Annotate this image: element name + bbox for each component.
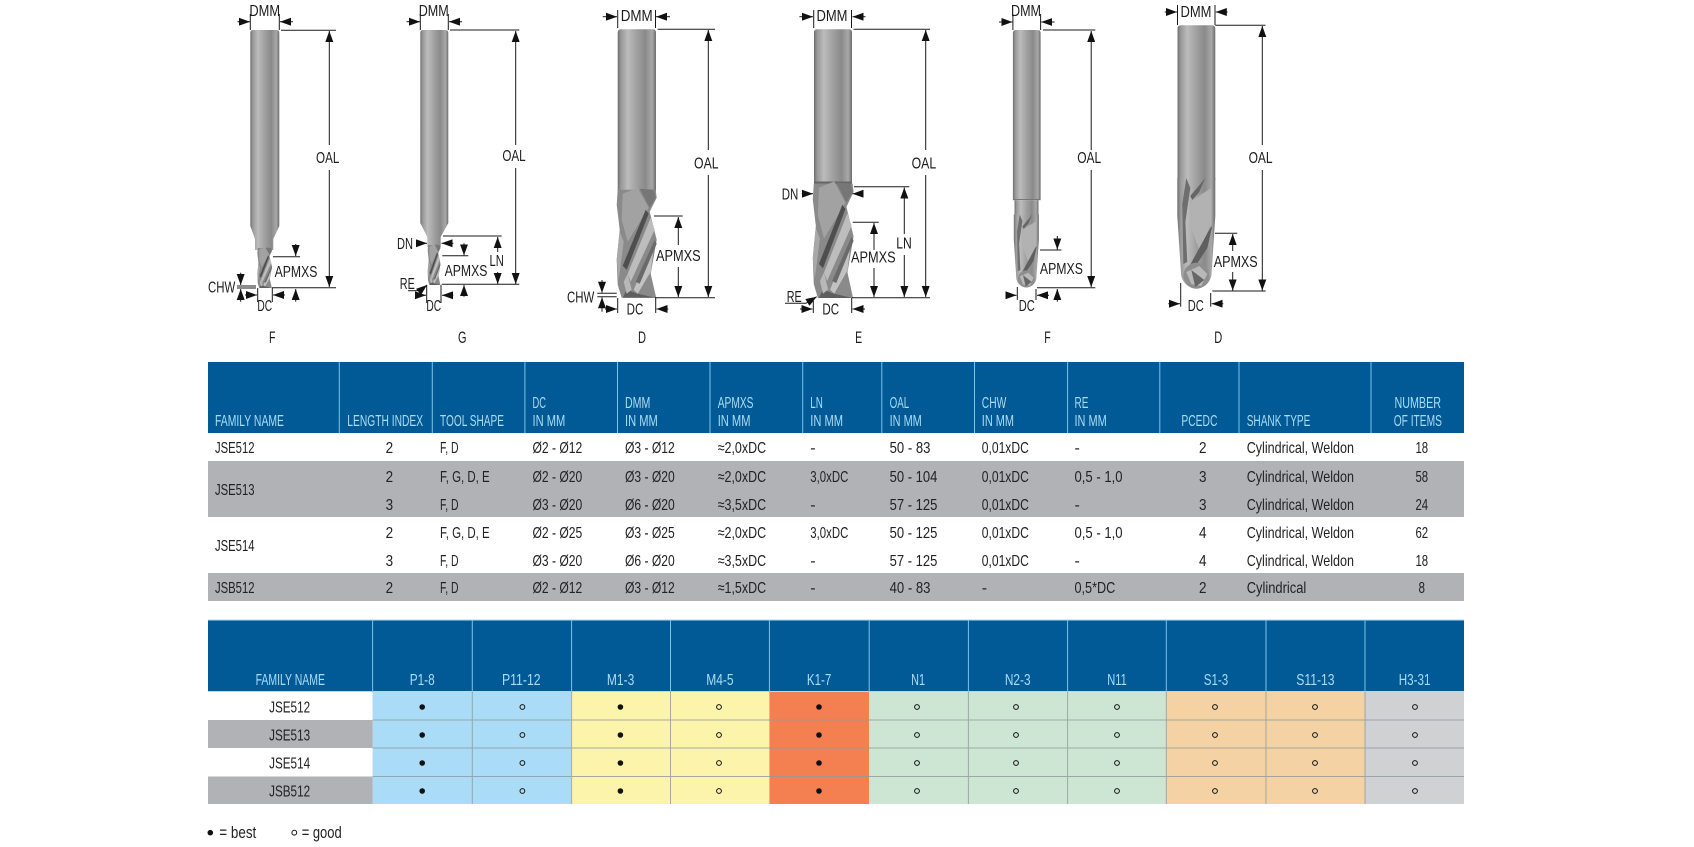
tool drawing: F short neck [208, 3, 339, 347]
row group: JSE514: 3,0xDC [810, 525, 848, 542]
row: JSB512: 40 - 83 [890, 580, 930, 597]
family name cells: JSB512 [269, 784, 310, 800]
dimension lines [406, 14, 519, 303]
row: JSE512: - [1074, 440, 1080, 457]
row group: JSE513: 24 [1415, 497, 1428, 514]
table header: FAMILY NAME [256, 672, 325, 689]
dimension labels [397, 3, 526, 315]
dimension labels: APMXS [1040, 261, 1083, 278]
row: JSB512: 2 [386, 580, 393, 597]
row: JSE512: JSE512 [215, 440, 255, 457]
dimension labels: APMXS [851, 250, 896, 267]
cutter body [1177, 25, 1215, 289]
table header: IN MM [890, 413, 922, 430]
table header: N2-3 [1005, 672, 1031, 689]
cutter body [617, 29, 657, 298]
row: JSE512: Cylindrical, Weldon [1247, 440, 1354, 457]
dimension labels: APMXS [1214, 254, 1258, 271]
row group: JSE514: 57 - 125 [890, 553, 937, 570]
row group: JSE513: 50 - 104 [890, 469, 937, 486]
row: JSE512 [215, 440, 1428, 457]
row group: JSE513: - [1074, 497, 1080, 514]
row: JSB512 [208, 573, 1464, 601]
cutter body [250, 30, 279, 288]
dimension labels: DC [822, 302, 839, 319]
row: JSE512: 2 [1199, 440, 1207, 457]
row: JSE512: F, D [440, 440, 458, 457]
table header: PCEDC [1181, 413, 1217, 430]
row: JSB512: F, D [440, 580, 458, 597]
dimension labels: LN [490, 253, 504, 270]
family name cells [208, 700, 373, 804]
row group: JSE514: Ø3 - Ø25 [625, 525, 675, 542]
row group: JSE513: Ø6 - Ø20 [625, 497, 675, 514]
row: JSE512: Ø3 - Ø12 [625, 440, 675, 457]
row group: JSE514: ≈3,5xDC [718, 553, 766, 570]
dimension labels: OAL [1077, 150, 1101, 167]
dimension labels: RE [400, 276, 415, 293]
table header: S1-3 [1204, 672, 1228, 689]
dimension labels: DN [397, 236, 413, 253]
table header: M4-5 [706, 672, 734, 689]
row: JSB512: 0,5*DC [1074, 580, 1115, 597]
shape letter D: D [1214, 328, 1222, 347]
table header: IN MM [810, 413, 843, 430]
dimension labels: DC [426, 298, 441, 315]
dimension labels [1011, 3, 1101, 315]
dimension labels: OAL [1249, 150, 1273, 167]
table header: N11 [1107, 672, 1127, 689]
shape letter D: D [638, 328, 646, 347]
row group: JSE514: 2 [386, 525, 393, 542]
table header: IN MM [625, 413, 658, 430]
row group: JSE514: Ø6 - Ø20 [625, 553, 675, 570]
family name cells: JSE513 [269, 728, 310, 744]
row group: JSE513: 3 [1199, 497, 1207, 514]
tool drawing: G neck with corner radius [397, 3, 526, 347]
dimension labels: OAL [316, 150, 339, 167]
dimension labels: DC [1019, 298, 1035, 315]
row group: JSE513: Ø3 - Ø20 [532, 497, 582, 514]
dimension labels: LN [896, 236, 912, 253]
table header: LENGTH INDEX [347, 413, 424, 430]
colored material columns [373, 692, 1464, 804]
row group: JSE513: Cylindrical, Weldon [1247, 497, 1354, 514]
table header: LN [810, 395, 823, 412]
tool drawing: D square end [567, 8, 719, 347]
table header: IN MM [718, 413, 750, 430]
row group: JSE514: 0,01xDC [982, 553, 1029, 570]
shape letter G: G [458, 328, 467, 347]
tool drawing: E corner radius [782, 8, 936, 347]
rating marks: best and good [419, 704, 1417, 794]
table header [208, 620, 1464, 692]
family name cells: JSE514 [269, 756, 310, 772]
material suitability table [208, 620, 1464, 804]
row: JSE512: - [810, 440, 816, 457]
row group: JSE514: - [810, 553, 816, 570]
table header: IN MM [1074, 413, 1107, 430]
dimension labels: DMM [1180, 4, 1212, 21]
table header [208, 362, 1464, 433]
row group: JSE514: 50 - 125 [890, 525, 937, 542]
table header: M1-3 [607, 672, 634, 689]
row: JSE512: 18 [1415, 440, 1428, 457]
dimension labels: DMM [621, 8, 653, 25]
row group: JSE513 [208, 461, 1464, 517]
dimension lines [999, 14, 1095, 302]
dimension labels: RE [787, 289, 802, 306]
table header: CHW [982, 395, 1007, 412]
row group: JSE514: 62 [1415, 525, 1428, 542]
dimension lines [597, 10, 715, 313]
specification table [208, 362, 1464, 601]
row: JSE512: ≈2,0xDC [718, 440, 766, 457]
table header: OAL [890, 395, 909, 412]
row group: JSE513: 0,01xDC [982, 469, 1029, 486]
table header: P11-12 [502, 672, 541, 689]
row group: JSE513: 0,5 - 1,0 [1074, 469, 1123, 486]
dimension labels: DMM [249, 3, 280, 20]
dimension labels: APMXS [445, 263, 487, 280]
dimension labels: OAL [694, 156, 719, 172]
dimension labels [208, 3, 339, 315]
dimension labels: OAL [502, 148, 526, 165]
shape letter F: F [269, 328, 276, 347]
tool drawing: D ball nose [1165, 4, 1273, 347]
dimension lines [1165, 5, 1266, 307]
row group: JSE513: JSE513 [215, 482, 255, 499]
dimension lines [785, 10, 930, 313]
table header: IN MM [982, 413, 1014, 430]
row group: JSE513: - [810, 497, 816, 514]
family name cells: JSE512 [269, 700, 310, 716]
table header: H3-31 [1399, 672, 1430, 689]
row: JSB512: 2 [1199, 580, 1207, 597]
dimension labels [1180, 4, 1273, 315]
dimension labels: APMXS [275, 264, 317, 281]
table header: S11-13 [1296, 672, 1335, 689]
row group: JSE513: F, D [440, 497, 458, 514]
row: JSB512: - [810, 580, 816, 597]
row group: JSE513: 0,01xDC [982, 497, 1029, 514]
legend: = best [219, 823, 257, 842]
row: JSE512: Ø2 - Ø12 [532, 440, 582, 457]
row: JSB512: Cylindrical [1247, 580, 1306, 597]
dimension labels: DC [257, 298, 272, 315]
row group: JSE514: 0,5 - 1,0 [1074, 525, 1123, 542]
row group: JSE514: 3 [386, 553, 393, 570]
row: JSE512: 0,01xDC [982, 440, 1029, 457]
row group: JSE513: 2 [386, 469, 393, 486]
row: JSB512: Ø2 - Ø12 [532, 580, 582, 597]
row group: JSE514: F, G, D, E [440, 525, 490, 542]
dimension labels: CHW [208, 280, 236, 297]
legend [208, 823, 342, 842]
row group: JSE514: - [1074, 553, 1080, 570]
cutter body [813, 29, 854, 298]
dimension labels: DMM [419, 3, 449, 20]
row: JSE512: 50 - 83 [890, 440, 930, 457]
table header: N1 [911, 672, 925, 689]
table header: RE [1074, 395, 1088, 412]
row group: JSE513: 3 [1199, 469, 1207, 486]
row group: JSE514: ≈2,0xDC [718, 525, 766, 542]
row group: JSE514: 4 [1199, 525, 1207, 542]
row group: JSE514: Ø3 - Ø20 [532, 553, 582, 570]
row group: JSE513: Ø2 - Ø20 [532, 469, 582, 486]
dimension labels: DMM [1011, 3, 1041, 20]
row group: JSE514: 0,01xDC [982, 525, 1029, 542]
table header: FAMILY NAME [215, 413, 284, 430]
table header: TOOL SHAPE [440, 413, 504, 430]
row: JSB512: 8 [1419, 580, 1425, 597]
table header: DMM [625, 395, 650, 412]
dimension lines [237, 14, 336, 302]
dimension labels: DC [1188, 298, 1204, 315]
legend: = good [302, 823, 342, 842]
row group: JSE513: F, G, D, E [440, 469, 490, 486]
dimension labels: DMM [816, 8, 848, 25]
row group: JSE514 [215, 525, 1428, 570]
table header: NUMBER [1394, 395, 1441, 412]
table header: DC [532, 395, 546, 412]
shape letter E: E [855, 328, 862, 347]
table header: SHANK TYPE [1247, 413, 1310, 430]
row: JSB512: Ø3 - Ø12 [625, 580, 675, 597]
row group: JSE514: 18 [1415, 553, 1428, 570]
tool drawing: F ball nose [999, 3, 1101, 347]
dimension labels: CHW [567, 290, 595, 307]
row: JSE512: 2 [386, 440, 393, 457]
dimension labels: DN [782, 187, 798, 204]
row group: JSE513: 58 [1415, 469, 1428, 486]
row group: JSE513: ≈3,5xDC [718, 497, 766, 514]
cutter body [1013, 30, 1041, 288]
row: JSB512: JSB512 [215, 580, 255, 597]
row: JSB512: ≈1,5xDC [718, 580, 766, 597]
table header: K1-7 [807, 672, 831, 689]
dimension labels: DC [627, 302, 643, 319]
row group: JSE513: 3 [386, 497, 393, 514]
row group: JSE513: ≈2,0xDC [718, 469, 766, 486]
row group: JSE514: Ø2 - Ø25 [532, 525, 582, 542]
dimension labels: OAL [912, 156, 936, 172]
row: JSB512: - [982, 580, 987, 597]
row group: JSE513: 3,0xDC [810, 469, 848, 486]
dimension labels: APMXS [656, 248, 701, 265]
row group: JSE513: Cylindrical, Weldon [1247, 469, 1354, 486]
row group: JSE514: Cylindrical, Weldon [1247, 553, 1354, 570]
row group: JSE514: Cylindrical, Weldon [1247, 525, 1354, 542]
shape letter F: F [1044, 328, 1051, 347]
row group: JSE513: 57 - 125 [890, 497, 937, 514]
table header: IN MM [532, 413, 565, 430]
row group: JSE513: Ø3 - Ø20 [625, 469, 675, 486]
table header: P1-8 [410, 672, 435, 689]
table header: OF ITEMS [1394, 413, 1442, 430]
dimension labels [567, 8, 719, 319]
dimension labels [782, 8, 936, 319]
row group: JSE514: 4 [1199, 553, 1207, 570]
table header: APMXS [718, 395, 754, 412]
cutter body [420, 30, 448, 285]
row group: JSE514: F, D [440, 553, 458, 570]
row group: JSE514: JSE514 [215, 538, 255, 555]
